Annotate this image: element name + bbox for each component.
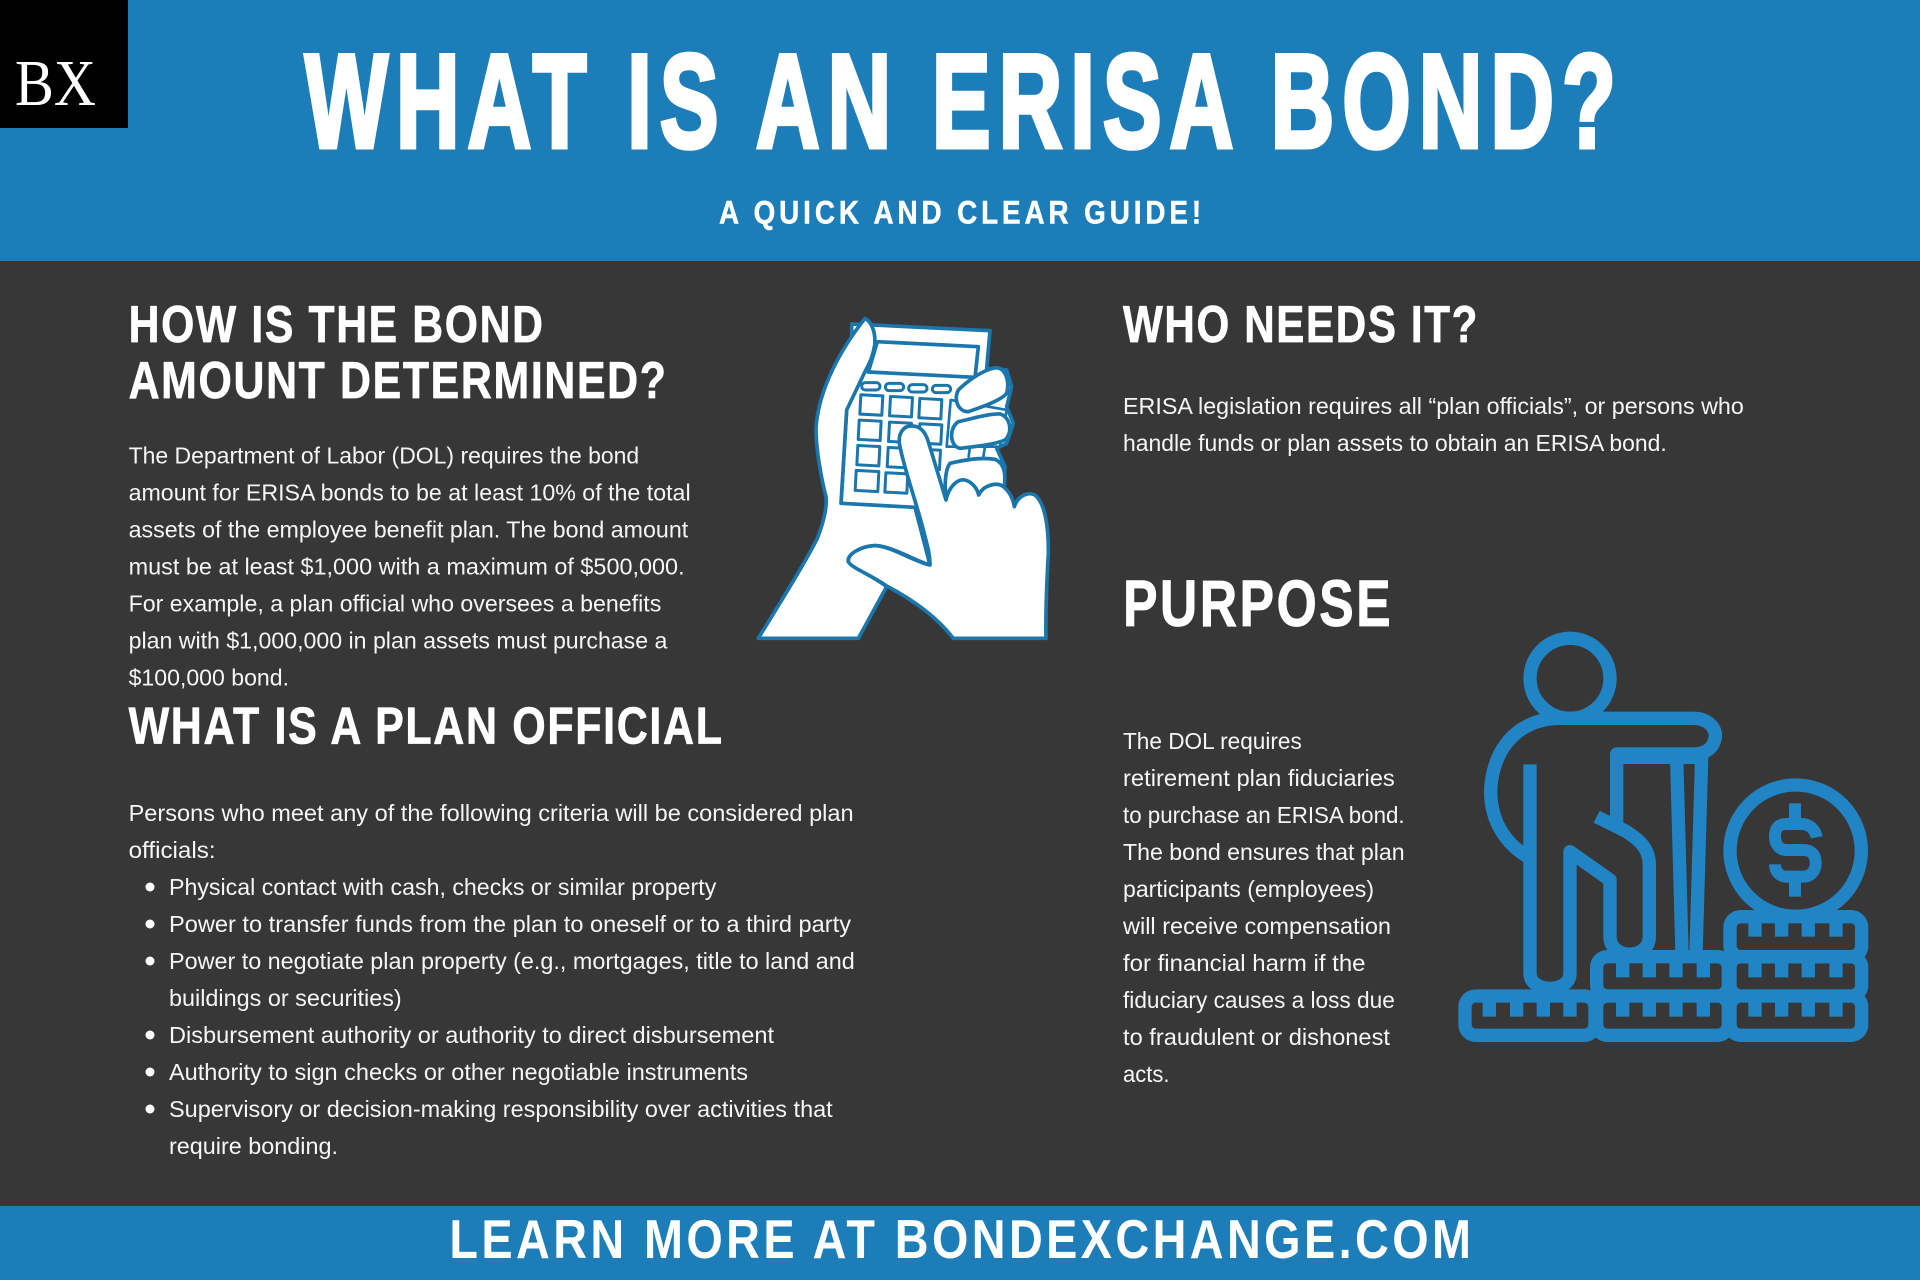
text block: who needs it [1123, 393, 1744, 456]
text block: purpose: retirement plan fiduciaries [1123, 765, 1395, 791]
text block: purpose [1122, 728, 1405, 1087]
heading: who needs it: WHO NEEDS IT? [1123, 296, 1479, 354]
text block: purpose: to fraudulent or dishonest [1123, 1024, 1390, 1050]
text block: who needs it: ERISA legislation requires all “plan officials”, or persons who [1123, 393, 1744, 419]
bullet list: Supervisory or decision-making responsibility over activities that [169, 1096, 833, 1122]
heading: what is a plan official: WHAT IS A PLAN OFFICIAL [129, 698, 724, 756]
panel: header band [0, 0, 1920, 261]
text block: purpose: to purchase an ERISA bond. [1123, 802, 1405, 828]
text block: bond amount explanation: The Department of Labor (DOL) requires the bond [129, 442, 639, 468]
bullet list: Power to transfer funds from the plan to oneself or to a third party [169, 911, 851, 937]
bullet list: Authority to sign checks or other negotiable instruments [169, 1059, 748, 1085]
text block: bond amount explanation: For example, a plan official who oversees a benefits [129, 590, 661, 616]
bullet list [146, 874, 855, 1159]
text block: bond amount explanation [129, 442, 691, 690]
text block: plan official criteria [129, 800, 855, 1159]
logo: BX [0, 0, 128, 128]
bullet list: Physical contact with cash, checks or similar property [169, 874, 717, 900]
text block: bond amount explanation: $100,000 bond. [129, 664, 289, 690]
icon: person with coin stacks [1465, 638, 1862, 1035]
text block: plan official criteria: officials: [129, 837, 216, 863]
text block: bond amount explanation: plan with $1,000,000 in plan assets must purchase a [129, 628, 668, 654]
coin stacks [1465, 917, 1862, 1035]
text block: purpose: for financial harm if the [1123, 950, 1366, 976]
text block: plan official criteria: Persons who meet any of the following criteria will be considered plan [129, 800, 854, 826]
icon: hands using calculator [758, 318, 1048, 638]
text block: bond amount explanation: assets of the employee benefit plan. The bond amount [129, 516, 689, 542]
bullet list: require bonding. [169, 1133, 338, 1159]
text block: purpose: participants (employees) [1123, 876, 1374, 902]
text block: purpose: The bond ensures that plan [1123, 839, 1405, 865]
text block: bond amount explanation: must be at least $1,000 with a maximum of $500,000. [129, 554, 685, 580]
heading: how is the bond amount determined [129, 296, 668, 410]
text block: purpose: will receive compensation [1122, 913, 1391, 939]
text block: purpose: The DOL requires [1123, 728, 1302, 754]
panel: footer band [0, 1206, 1920, 1280]
subtitle: A QUICK AND CLEAR GUIDE! [719, 194, 1205, 230]
heading: how is the bond amount determined: HOW IS THE BOND [129, 296, 545, 354]
bullet list: buildings or securities) [169, 985, 402, 1011]
text block: purpose: acts. [1123, 1061, 1170, 1087]
footer call to action: LEARN MORE AT BONDEXCHANGE.COM [449, 1208, 1474, 1270]
text block: purpose: fiduciary causes a loss due [1123, 987, 1395, 1013]
heading: purpose: PURPOSE [1123, 566, 1393, 640]
bullet list: Disbursement authority or authority to direct disbursement [169, 1022, 774, 1048]
heading: how is the bond amount determined: AMOUNT DETERMINED? [129, 352, 668, 410]
logo: BX: BX [15, 47, 96, 120]
bullet list: Power to negotiate plan property (e.g., mortgages, title to land and [169, 948, 855, 974]
text block: who needs it: handle funds or plan assets to obtain an ERISA bond. [1123, 430, 1667, 456]
text block: bond amount explanation: amount for ERISA bonds to be at least 10% of the total [129, 480, 691, 506]
